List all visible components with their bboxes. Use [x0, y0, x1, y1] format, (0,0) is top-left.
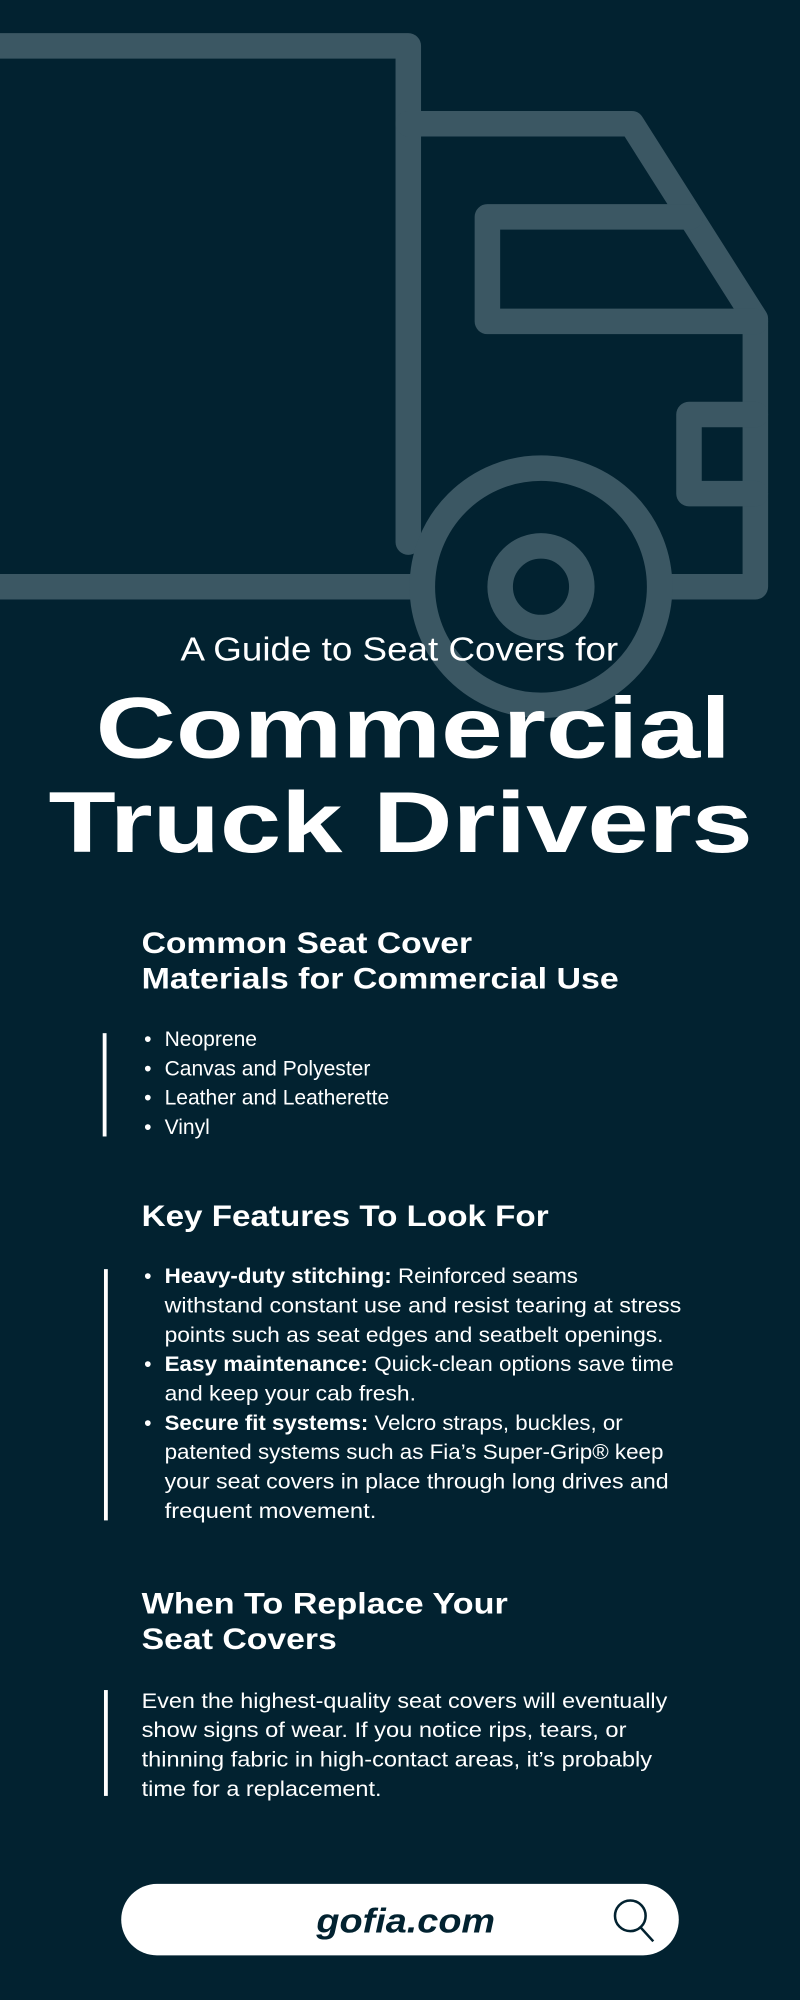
heading: materials	[142, 927, 619, 996]
footer: url pill: gofia.com	[315, 1902, 495, 1940]
panel: replace text: Even the highest-quality seat covers will eventually	[142, 1690, 668, 1713]
panel: materials list: Leather and Leatherette	[165, 1087, 389, 1110]
panel: key features list: •	[144, 1265, 152, 1288]
footer: url pill	[121, 1884, 679, 1955]
panel: key features list: •	[144, 1353, 152, 1376]
panel: key features list: frequent movement.	[165, 1500, 376, 1523]
panel: materials list: •	[144, 1087, 152, 1110]
icon: search	[615, 1901, 653, 1941]
panel: replace text: thinning fabric in high-contact areas, it’s probably	[142, 1749, 653, 1772]
panel: materials list: Canvas and Polyester	[165, 1057, 370, 1080]
heading: when to replace: When To Replace Your	[142, 1588, 508, 1621]
panel: key features list: withstand constant use and resist tearing at stress	[163, 1295, 681, 1317]
panel: key features list	[104, 1265, 681, 1523]
panel: key features list: Easy maintenance: Quick-clean options save time	[165, 1353, 674, 1376]
heading: when to replace: Seat Covers	[142, 1623, 337, 1656]
panel: key features list: •	[144, 1412, 152, 1435]
heading: materials: Common Seat Cover	[142, 927, 472, 960]
panel: key features list: Heavy-duty stitching: Reinforced seams	[165, 1265, 578, 1288]
panel: key features list: Secure fit systems: Velcro straps, buckles, or	[165, 1412, 623, 1435]
heading: materials: Materials for Commercial Use	[142, 963, 619, 996]
panel: replace text	[104, 1690, 668, 1801]
panel: materials list: •	[144, 1116, 152, 1139]
panel: materials list: •	[144, 1057, 152, 1080]
panel: key features list: patented systems such as Fia’s Super-Grip® keep	[165, 1441, 663, 1464]
panel: key features list: and keep your cab fresh.	[165, 1383, 416, 1406]
panel: materials list: Vinyl	[165, 1116, 210, 1139]
panel: materials list: Neoprene	[165, 1028, 257, 1051]
panel: key features list: points such as seat edges and seatbelt openings.	[165, 1324, 663, 1347]
title	[48, 680, 753, 871]
title: Truck Drivers	[48, 774, 753, 871]
panel: replace text: show signs of wear. If you notice rips, tears, or	[142, 1719, 626, 1742]
title: Commercial	[96, 680, 731, 777]
panel: replace text: time for a replacement.	[142, 1778, 381, 1801]
icon: truck outline	[0, 46, 755, 705]
panel: materials list: •	[144, 1028, 152, 1051]
panel: key features list: your seat covers in place through long drives and	[165, 1471, 669, 1494]
heading: key features: Key Features To Look For	[142, 1200, 549, 1233]
subtitle: A Guide to Seat Covers for	[181, 632, 618, 669]
panel: materials list	[103, 1028, 389, 1139]
heading: when to replace	[142, 1588, 508, 1656]
